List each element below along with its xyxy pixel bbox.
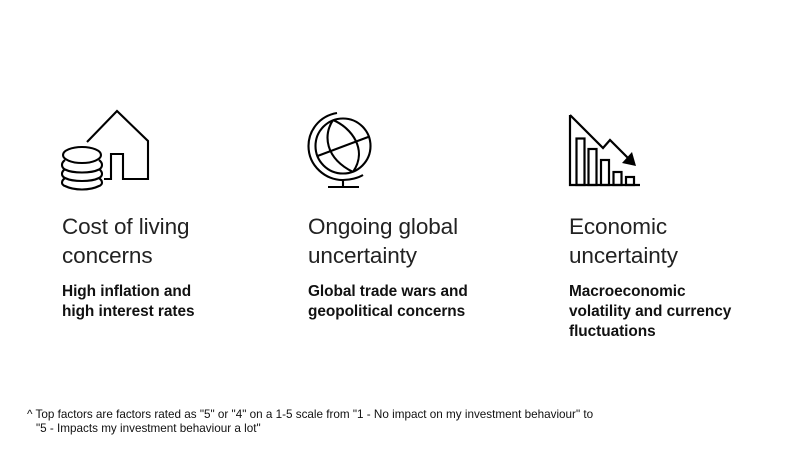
panel: cost of living xyxy=(60,110,194,320)
heading: cost of living: concerns xyxy=(62,243,152,268)
footnote: "5 - Impacts my investment behaviour a lot" xyxy=(36,422,261,435)
footnote: ^ Top factors are factors rated as "5" or "4" on a 1-5 scale from "1 - No impact on my investment behaviour" to xyxy=(27,408,593,421)
icon: house and coins xyxy=(60,110,150,190)
footnote xyxy=(27,408,593,435)
text: global uncertainty detail: geopolitical concerns xyxy=(308,303,465,320)
heading: global uncertainty: Ongoing global xyxy=(308,214,458,239)
heading: cost of living xyxy=(62,214,189,268)
heading: economic uncertainty: Economic xyxy=(569,214,667,239)
text: cost of living detail: High inflation and xyxy=(62,283,191,300)
text: economic uncertainty detail: volatility and currency xyxy=(569,303,731,320)
icon: globe xyxy=(307,112,372,188)
text: global uncertainty detail: Global trade wars and xyxy=(308,283,468,300)
heading: global uncertainty xyxy=(308,214,458,268)
text: global uncertainty detail xyxy=(308,283,468,320)
text: cost of living detail xyxy=(62,283,194,320)
panel: global uncertainty xyxy=(307,112,468,320)
heading: economic uncertainty xyxy=(569,214,678,268)
heading: cost of living: Cost of living xyxy=(62,214,189,239)
icon: declining bar chart xyxy=(568,114,640,186)
text: economic uncertainty detail: fluctuations xyxy=(569,323,656,340)
text: economic uncertainty detail: Macroeconomic xyxy=(569,283,686,300)
text: cost of living detail: high interest rates xyxy=(62,303,194,320)
heading: economic uncertainty: uncertainty xyxy=(569,243,678,268)
panel: economic uncertainty xyxy=(568,114,732,340)
heading: global uncertainty: uncertainty xyxy=(308,243,417,268)
text: economic uncertainty detail xyxy=(569,283,732,340)
